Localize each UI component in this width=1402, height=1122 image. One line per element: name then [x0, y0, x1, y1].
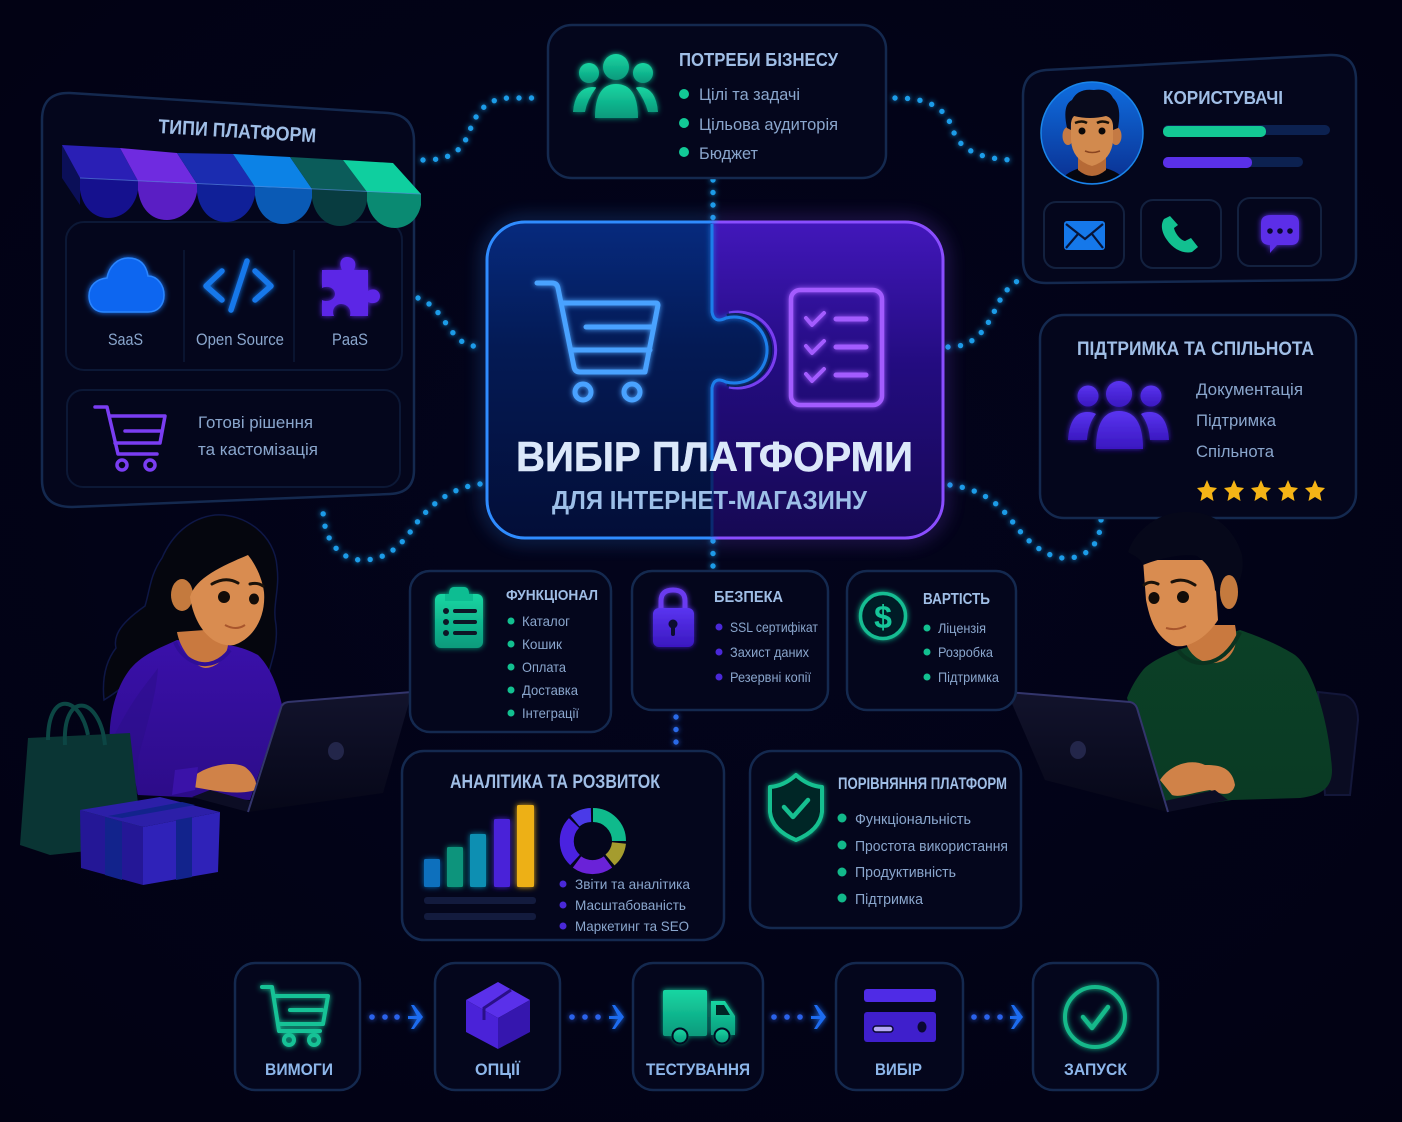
bar chart	[424, 805, 534, 887]
arrow: step 3 to 4	[771, 1005, 826, 1029]
list: needs: Цілі та задачі	[699, 85, 800, 104]
shopping bag	[20, 733, 143, 855]
text: ready solutions: Готові рішення	[198, 413, 313, 432]
title: ВИБІР ПЛАТФОРМИ	[516, 433, 913, 480]
label: Open Source: Open Source	[196, 330, 284, 349]
list: functionality: Каталог	[522, 613, 570, 629]
list: support: Підтримка	[1196, 411, 1277, 430]
heading: cost: ВАРТІСТЬ	[923, 591, 990, 608]
progress bars	[1163, 125, 1330, 168]
list: needs: Цільова аудиторія	[699, 115, 838, 134]
heading: support: ПІДТРИМКА ТА СПІЛЬНОТА	[1077, 339, 1314, 360]
icon: code	[206, 261, 271, 310]
list: functionality: Оплата	[522, 659, 566, 675]
list: cost: Ліцензія	[938, 620, 986, 636]
panel: support and community	[1040, 315, 1356, 518]
list: cost: Розробка	[938, 644, 993, 660]
label: launch: ЗАПУСК	[1064, 1060, 1128, 1079]
panel: types of platforms	[42, 93, 421, 507]
list: functionality: Кошик	[522, 636, 563, 652]
list: security: Резервні копії	[730, 669, 811, 685]
button: phone	[1141, 200, 1221, 268]
dotted connectors	[323, 98, 1101, 752]
heading: users: КОРИСТУВАЧІ	[1163, 88, 1283, 108]
laptop	[1160, 790, 1228, 812]
text: ready solutions	[198, 413, 318, 459]
list: security: Захист даних	[730, 644, 809, 660]
sweater	[1127, 630, 1332, 810]
icon: puzzle	[322, 257, 380, 316]
label: SaaS: SaaS	[108, 330, 143, 349]
icon: violet cart	[95, 407, 165, 470]
icon: dollar: $	[874, 599, 892, 635]
step: testing	[633, 963, 763, 1090]
icon: cloud	[89, 258, 164, 312]
list: comparison: Продуктивність	[855, 864, 956, 881]
label: requirements: ВИМОГИ	[265, 1060, 333, 1079]
panel: platform comparison	[750, 751, 1021, 928]
list: analytics	[560, 876, 690, 934]
text: ready solutions: та кастомізація	[198, 440, 318, 459]
list: needs	[679, 85, 838, 163]
heading: analytics: АНАЛІТИКА ТА РОЗВИТОК	[450, 772, 660, 793]
rating stars	[1197, 480, 1325, 501]
awning	[62, 145, 421, 228]
list: functionality: Доставка	[522, 682, 578, 698]
hand	[193, 764, 256, 792]
list: functionality	[508, 613, 579, 721]
card: cost	[847, 571, 1016, 710]
hair	[1128, 512, 1243, 600]
label: PaaS: PaaS	[332, 330, 368, 349]
icon: people	[573, 54, 658, 118]
button: email	[1044, 202, 1124, 268]
step: options	[435, 963, 560, 1090]
list: support: Спільнота	[1196, 442, 1275, 461]
icon: check circle	[1065, 987, 1125, 1047]
heading: security: БЕЗПЕКА	[714, 589, 783, 606]
list: comparison: Простота використання	[855, 838, 1008, 855]
list: comparison: Підтримка	[855, 891, 924, 908]
person: woman with laptop	[20, 515, 412, 885]
icon: checklist	[791, 290, 882, 405]
heading: functionality: ФУНКЦІОНАЛ	[506, 587, 598, 604]
list: functionality: Інтеграції	[522, 705, 579, 721]
icon: people violet	[1068, 381, 1169, 449]
label: testing: ТЕСТУВАННЯ	[646, 1060, 750, 1079]
panel: analytics	[402, 751, 724, 940]
heading: comparison: ПОРІВНЯННЯ ПЛАТФОРМ	[838, 774, 1007, 793]
icon: box	[466, 982, 530, 1049]
avatar	[1041, 82, 1143, 190]
arrow: step 4 to 5	[971, 1005, 1023, 1029]
step: requirements	[235, 963, 360, 1090]
gift box	[80, 797, 220, 827]
icon: lock	[653, 590, 694, 647]
chair	[1318, 692, 1358, 795]
list: comparison	[838, 811, 1008, 908]
arrow: step 1 to 2	[369, 1005, 423, 1029]
hand	[1160, 762, 1235, 796]
list: support: Документація	[1196, 380, 1303, 399]
icon: truck	[663, 990, 735, 1044]
list: security	[716, 619, 819, 685]
icon: clipboard	[435, 587, 483, 648]
icon: card	[864, 989, 936, 1042]
icon: shield	[770, 775, 822, 840]
list: comparison: Функціональність	[855, 811, 971, 828]
card: functionality	[410, 571, 611, 732]
arrow: step 2 to 3	[569, 1005, 624, 1029]
sweater	[110, 640, 282, 800]
step: launch	[1033, 963, 1158, 1090]
panel: users	[1023, 55, 1356, 283]
icon: green cart	[262, 987, 328, 1045]
laptop	[192, 790, 268, 812]
list: analytics: Масштабованість	[575, 897, 686, 913]
list: security: SSL сертифікат	[730, 619, 819, 635]
button: chat	[1238, 198, 1321, 266]
panel: business needs	[548, 25, 886, 178]
list: cost	[924, 620, 999, 685]
person: man with laptop	[1007, 512, 1358, 812]
heading: types of platforms: ТИПИ ПЛАТФОРМ	[158, 116, 317, 147]
label: choice: ВИБІР	[875, 1060, 922, 1079]
list: cost: Підтримка	[938, 669, 999, 685]
icon: blue cart	[537, 283, 658, 400]
donut chart	[567, 815, 619, 867]
list: analytics: Маркетинг та SEO	[575, 918, 689, 934]
card: security	[632, 571, 828, 710]
list: analytics: Звіти та аналітика	[575, 876, 690, 892]
icon: dollar	[860, 594, 906, 638]
central panel: platform choice	[487, 222, 943, 538]
list: needs: Бюджет	[699, 144, 758, 163]
hair	[103, 515, 278, 700]
subtitle: ДЛЯ ІНТЕРНЕТ-МАГАЗИНУ	[552, 485, 868, 515]
neck and face	[1185, 625, 1236, 663]
list: support	[1196, 380, 1303, 461]
heading: business needs: ПОТРЕБИ БІЗНЕСУ	[679, 50, 839, 70]
step: choice	[836, 963, 963, 1090]
neck and face	[177, 630, 228, 668]
label: options: ОПЦІЇ	[475, 1060, 521, 1079]
